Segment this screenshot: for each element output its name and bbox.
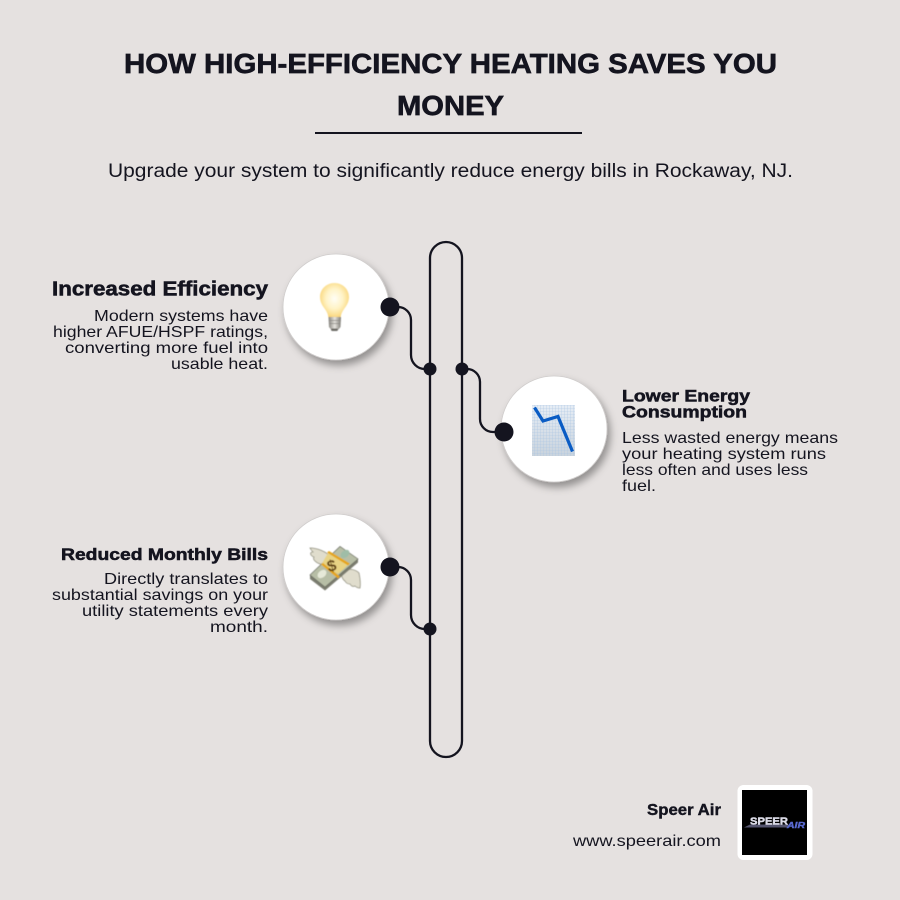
node: efficiency large — [380, 298, 400, 316]
node: energy large — [494, 422, 514, 442]
icon: money with wings — [310, 546, 360, 590]
body: increased efficiency: Modern systems have — [94, 308, 268, 325]
body: reduced monthly bills: utility statements every — [82, 603, 268, 620]
bill stack side — [310, 558, 358, 590]
body: lower energy consumption: less often and uses less — [622, 462, 808, 479]
body: lower energy consumption: your heating system runs — [622, 446, 826, 463]
circle: efficiency — [283, 254, 389, 360]
connector: bills to timeline — [390, 567, 430, 629]
band — [321, 553, 348, 574]
heading: lower energy consumption: Consumption — [622, 402, 747, 422]
panel: reduced monthly bills text — [52, 545, 269, 636]
title: HOW HIGH-EFFICIENCY HEATING SAVES YOU — [124, 48, 777, 79]
circle: bills — [283, 514, 389, 620]
heading: increased efficiency: Increased Efficiency — [52, 278, 269, 300]
circle: energy — [501, 376, 607, 482]
bill top — [310, 546, 358, 587]
node: bills large — [380, 558, 400, 576]
connector: timeline to energy — [462, 369, 504, 432]
panel: lower energy consumption text — [622, 386, 838, 495]
bill ovals — [316, 568, 328, 580]
icon: light bulb — [320, 283, 349, 331]
node: efficiency junction — [424, 362, 436, 376]
body: reduced monthly bills: month. — [210, 619, 268, 636]
icon: money with wings: $ — [325, 557, 338, 576]
heading: reduced monthly bills: Reduced Monthly Bills — [61, 545, 268, 564]
icon: falling chart — [532, 405, 575, 456]
subtitle: Upgrade your system to significantly reduce energy bills in Rockaway, NJ. — [108, 161, 793, 182]
body: reduced monthly bills: substantial savings on your — [52, 587, 269, 604]
heading: lower energy consumption: Lower Energy — [622, 386, 751, 406]
central capsule timeline — [430, 242, 462, 757]
connector: efficiency to timeline — [390, 307, 430, 369]
body: lower energy consumption — [622, 430, 838, 495]
title underline — [315, 132, 582, 134]
title — [124, 48, 777, 121]
logo: SPEER — [750, 816, 788, 828]
node: energy junction — [456, 362, 468, 376]
body: increased efficiency: usable heat. — [171, 356, 268, 373]
node: bills junction — [424, 622, 436, 636]
logo: AIR — [786, 820, 806, 830]
panel: increased efficiency text — [52, 278, 269, 373]
footer brand name: Speer Air — [647, 802, 721, 819]
body: lower energy consumption: fuel. — [622, 478, 656, 495]
footer website: www.speerair.com — [572, 833, 721, 850]
body: increased efficiency: converting more fuel into — [65, 340, 268, 357]
title: MONEY — [397, 90, 504, 121]
left wing — [310, 548, 333, 565]
body: increased efficiency: higher AFUE/HSPF ratings, — [53, 324, 268, 341]
body: lower energy consumption: Less wasted energy means — [622, 430, 838, 447]
right wing — [342, 569, 360, 588]
body: reduced monthly bills — [52, 571, 269, 636]
body: increased efficiency — [53, 308, 268, 373]
body: reduced monthly bills: Directly translates to — [104, 571, 268, 588]
logo — [738, 785, 812, 860]
heading: lower energy consumption — [622, 386, 751, 422]
